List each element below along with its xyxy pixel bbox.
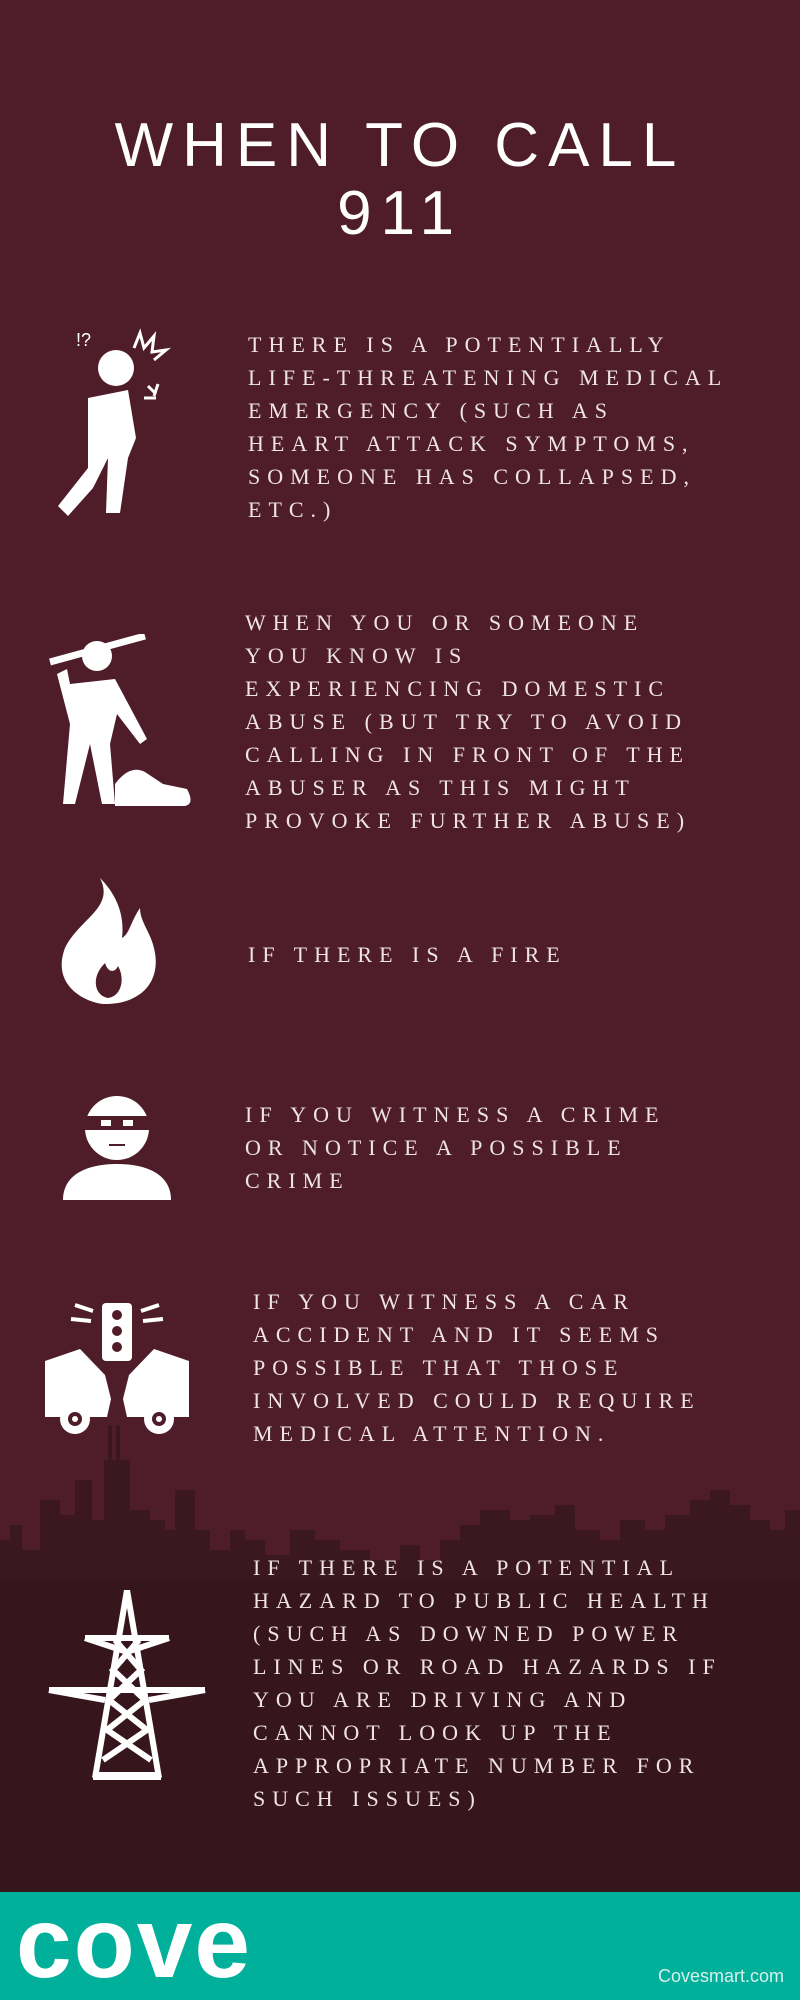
text: medical emergency: LIFE-THREATENING MEDICAL bbox=[248, 365, 728, 390]
text: public hazard: IF THERE IS A POTENTIAL bbox=[253, 1555, 680, 1580]
text: car accident: POSSIBLE THAT THOSE bbox=[253, 1355, 624, 1380]
icon: medical emergency person bbox=[58, 328, 171, 516]
title bbox=[114, 111, 685, 248]
text: domestic abuse: WHEN YOU OR SOMEONE bbox=[245, 610, 644, 635]
text: domestic abuse: ABUSER AS THIS MIGHT bbox=[245, 775, 636, 800]
text: public hazard: YOU ARE DRIVING AND bbox=[253, 1687, 632, 1712]
text: car accident: INVOLVED COULD REQUIRE bbox=[253, 1388, 701, 1413]
text: public hazard: HAZARD TO PUBLIC HEALTH bbox=[253, 1588, 715, 1613]
text: fire: IF THERE IS A FIRE bbox=[248, 942, 567, 967]
text: car accident: IF YOU WITNESS A CAR bbox=[253, 1289, 635, 1314]
text: crime: CRIME bbox=[245, 1168, 350, 1193]
text: domestic abuse: YOU KNOW IS bbox=[245, 643, 468, 668]
icon: medical emergency person: !? bbox=[76, 330, 91, 350]
text: domestic abuse: CALLING IN FRONT OF THE bbox=[245, 742, 690, 767]
text: crime: IF YOU WITNESS A CRIME bbox=[245, 1102, 665, 1127]
text: medical emergency: HEART ATTACK SYMPTOMS, bbox=[248, 431, 695, 456]
text: medical emergency: ETC.) bbox=[248, 497, 337, 522]
icon: burglar bbox=[63, 1096, 171, 1200]
skyline background bbox=[0, 1425, 800, 1892]
text: public hazard: (SUCH AS DOWNED POWER bbox=[253, 1621, 684, 1646]
title: WHEN TO CALL bbox=[115, 111, 685, 180]
text: car accident bbox=[253, 1289, 701, 1446]
text: car accident: ACCIDENT AND IT SEEMS bbox=[253, 1322, 665, 1347]
text: crime bbox=[245, 1102, 665, 1193]
text: medical emergency: THERE IS A POTENTIALLY bbox=[248, 332, 671, 357]
text: public hazard: APPROPRIATE NUMBER FOR bbox=[253, 1753, 700, 1778]
title: 911 bbox=[337, 179, 463, 248]
text: domestic abuse: EXPERIENCING DOMESTIC bbox=[245, 676, 670, 701]
text: medical emergency: SOMEONE HAS COLLAPSED, bbox=[248, 464, 696, 489]
footer bar bbox=[0, 1892, 800, 2000]
icon: fire bbox=[62, 878, 156, 1004]
icon: power tower bbox=[48, 1590, 206, 1780]
logo: cove: cove bbox=[16, 1887, 252, 1999]
text: public hazard: SUCH ISSUES) bbox=[253, 1786, 482, 1811]
icon: car accident bbox=[45, 1303, 189, 1434]
text: public hazard: CANNOT LOOK UP THE bbox=[253, 1720, 618, 1745]
icon: domestic abuse bbox=[49, 634, 191, 806]
text: medical emergency bbox=[248, 332, 728, 522]
text: public hazard bbox=[253, 1555, 722, 1811]
text: public hazard: LINES OR ROAD HAZARDS IF bbox=[253, 1654, 722, 1679]
text: medical emergency: EMERGENCY (SUCH AS bbox=[248, 398, 614, 423]
text: domestic abuse: ABUSE (BUT TRY TO AVOID bbox=[245, 709, 688, 734]
text: domestic abuse bbox=[245, 610, 691, 833]
footer url: Covesmart.com bbox=[658, 1966, 784, 1986]
text: domestic abuse: PROVOKE FURTHER ABUSE) bbox=[245, 808, 691, 833]
text: car accident: MEDICAL ATTENTION. bbox=[253, 1421, 610, 1446]
text: crime: OR NOTICE A POSSIBLE bbox=[245, 1135, 628, 1160]
